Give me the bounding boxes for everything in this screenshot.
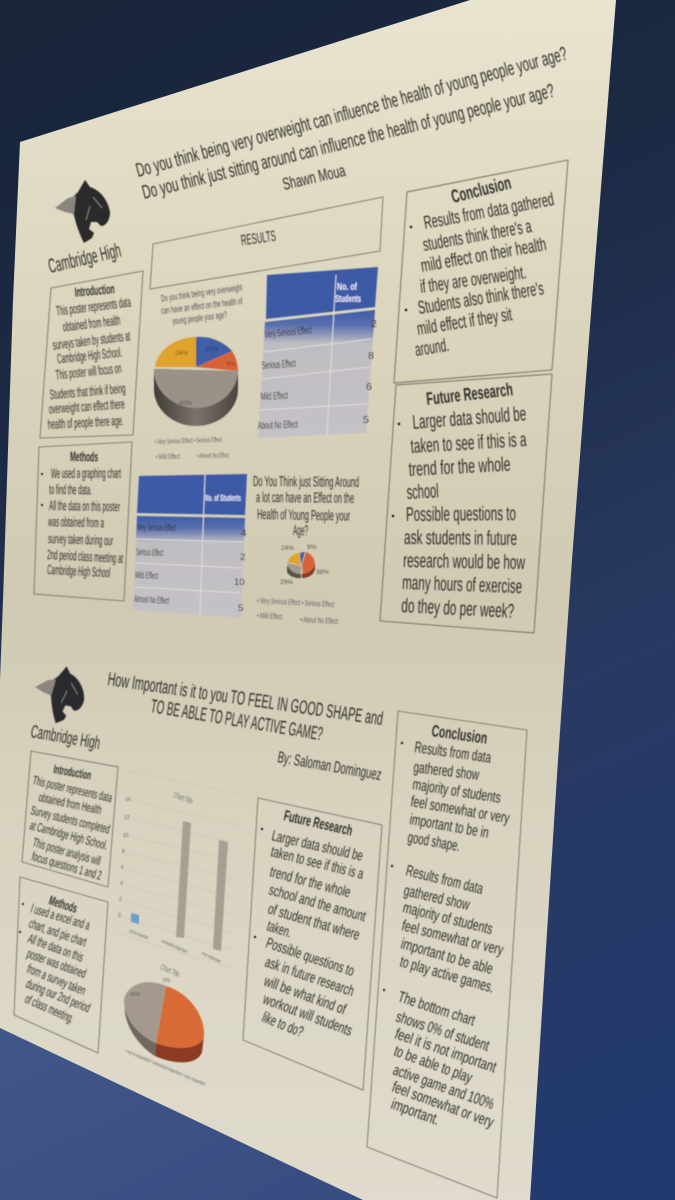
panel: conclusion: good shape. [406, 829, 461, 855]
bar chart: 6 [121, 865, 124, 871]
bar chart: 10 [123, 833, 129, 839]
pie chart: 0% [163, 978, 171, 984]
panel: conclusion: Conclusion [449, 172, 513, 207]
panel: future research: Future Research [425, 379, 514, 409]
pie chart 2: 9% [307, 544, 317, 551]
panel: conclusion: important. [389, 1096, 441, 1129]
table 1: Very Serious Effect [264, 324, 312, 341]
panel: conclusion: feel somewhat or very [390, 1079, 496, 1131]
table 1: Students [335, 294, 361, 305]
panel: conclusion: shows 0% of student [394, 1009, 492, 1055]
panel: future research: Future Research [282, 807, 354, 840]
pie chart [124, 963, 206, 1088]
school name: Cambridge High [29, 721, 102, 753]
table 2: 4 [241, 528, 246, 539]
table 2: Very Serious Effect [137, 522, 176, 534]
pie chart 1: 9% [226, 361, 236, 368]
pie chart 2: 24% [281, 545, 294, 552]
pie chart: ▪ not to important ▪ somewhat important ▪ very important [124, 1048, 206, 1088]
table 1: 8 [368, 350, 374, 362]
panel: conclusion: majority of students [401, 899, 495, 938]
panel: conclusion: feel it is not important [393, 1026, 499, 1076]
bar chart: Chart Title [172, 790, 194, 806]
pie chart: 46% [130, 992, 141, 998]
pie chart 2: 29% [280, 579, 293, 586]
panel: introduction [40, 271, 143, 438]
table 2: 5 [238, 603, 243, 614]
table 1: 6 [366, 381, 372, 393]
panel: methods: All the data on this poster [49, 498, 120, 514]
panel: introduction [22, 751, 118, 887]
panel: future research: Larger data should be [412, 403, 527, 434]
panel: future research: ask students in future [404, 527, 517, 550]
panel: methods: to find the data. [49, 482, 92, 497]
panel: future research: workout will students [260, 991, 355, 1040]
poster 2 title [106, 669, 384, 784]
chart 1 question [160, 282, 243, 327]
panel: future research: school and the amount [267, 882, 368, 926]
icon: panther logo [55, 180, 110, 243]
panel: introduction: Introduction [74, 281, 115, 300]
poster 2 title: TO BE ABLE TO PLAY ACTIVE GAME? [149, 696, 324, 745]
chart 1 legend [155, 437, 229, 461]
panel: introduction: Introduction [52, 762, 92, 783]
table 2: 2 [240, 552, 245, 563]
table 1: 2 [371, 318, 377, 330]
panel: conclusion: Results from data gathered [422, 188, 556, 233]
panel: introduction: This poster represents data [55, 294, 132, 319]
panel: future research: ask in future research [263, 954, 356, 1000]
chart 2 question: Age? [293, 523, 308, 539]
bar chart: very important [200, 950, 222, 965]
panel: methods: was obtained from a [47, 514, 105, 530]
panel: future research: like to do? [260, 1009, 306, 1041]
chart 2 legend: ▪ Mild Effect [257, 611, 283, 621]
panel: conclusion [367, 711, 527, 1198]
poster 2 title: How Important is it to you TO FEEL IN GOOD SHAPE and [106, 669, 384, 730]
poster 1 title: Shawn Moua [281, 161, 348, 194]
table 1 [258, 267, 378, 438]
pie chart 1: 24% [175, 350, 188, 357]
chart 1 legend: ▪ Very Serious Effect ▪ Serious Effect [155, 437, 222, 446]
chart 1 legend: ▪ Mild Effect [156, 454, 180, 461]
pie chart 1 [154, 337, 238, 426]
panel: introduction: This poster represents data [31, 773, 113, 805]
panel: conclusion: Results from data [404, 862, 485, 898]
panel: introduction: Cambridge High School. [56, 345, 123, 366]
panel: introduction: focus questions 1 and 2 [30, 849, 103, 883]
carpet: lower left wall [0, 1000, 420, 1200]
panel: methods: of class meeting. [23, 991, 76, 1026]
panel: conclusion: The bottom chart [396, 989, 478, 1030]
panel: methods: Methods [70, 449, 98, 464]
panel: conclusion: feel somewhat or very [400, 917, 505, 959]
panel: methods: Methods [47, 893, 79, 916]
panel: conclusion: Conclusion [430, 722, 488, 748]
panel: future research: trend for the whole [268, 863, 353, 901]
pie chart 1: 40% [179, 400, 192, 407]
panel: conclusion: majority of students [411, 776, 502, 807]
panel: conclusion: important to be in [408, 811, 490, 842]
panel: conclusion: gathered show [413, 759, 481, 784]
panel: conclusion: Students also think there's [416, 277, 545, 318]
panel: methods: I used a excel and a [29, 901, 92, 933]
table 1: Mild Effect [261, 390, 288, 403]
panel: methods: chart, and pie chart [27, 916, 89, 949]
panel: methods: We used a graphing chart [51, 466, 121, 481]
table 2 [133, 474, 247, 618]
panel: conclusion: active game and 100% [391, 1062, 496, 1113]
bar chart: 8 [122, 849, 125, 855]
bar chart [117, 771, 243, 968]
poster 2: good shape and active games survey [14, 662, 527, 1198]
chart 2 legend [257, 596, 339, 626]
panel: introduction: at Cambridge High School. [28, 818, 109, 853]
panel: conclusion: if they are overweight. [419, 261, 528, 297]
panel: conclusion: mild effect on their health [419, 233, 548, 276]
panel: introduction: This poster will focus on [55, 361, 122, 382]
panel: methods: All the data on this [26, 931, 86, 965]
chart 1 question: young people your age? [172, 310, 228, 327]
panel: conclusion: students think there's a [421, 215, 533, 255]
panel: introduction: overweight can effect there [48, 396, 125, 417]
bar chart: 0 [118, 913, 121, 919]
table 2: 10 [234, 577, 245, 588]
panel: results banner [150, 197, 383, 289]
bar chart: not to important [128, 928, 149, 941]
bar chart: 4 [120, 881, 123, 887]
panel: methods: from a survey taken [25, 961, 88, 998]
table 2: Mild Effect [135, 570, 158, 582]
pie chart 1: 18% [205, 346, 218, 353]
panel: introduction: obtained from health [62, 313, 121, 335]
panel: future research: many hours of exercise [402, 572, 523, 598]
panel: conclusion: feel somewhat or very [409, 793, 511, 827]
bar chart: 14 [125, 797, 131, 803]
panel: future research: of student that where [266, 901, 362, 944]
panel: introduction: Survey students completed [29, 803, 111, 837]
chart 1 question: can have an effect on the health of [160, 296, 243, 317]
panel: results banner: RESULTS [240, 228, 277, 249]
bar chart: 12 [124, 815, 130, 821]
table 2: Almost No Effect [134, 594, 170, 607]
school name: Cambridge High [46, 240, 123, 278]
table 1: About No Effect [258, 419, 298, 432]
pie chart 2: 38% [316, 569, 329, 576]
chart 1 question: Do you think being very overweight [160, 282, 243, 305]
table 2: Serious Effect [136, 547, 163, 559]
table 1: 5 [363, 414, 369, 426]
panel: methods [34, 442, 132, 601]
table 1: No. of [337, 282, 357, 293]
bar chart: somewhat important [160, 938, 189, 955]
panel: conclusion: around. [413, 334, 450, 360]
table 1: Serious Effect [261, 358, 296, 372]
panel: conclusion [394, 160, 568, 383]
panel: methods: poster was obtained [25, 946, 88, 981]
panel: methods: during our 2nd period [24, 976, 93, 1015]
chart 2 question: Health of Young People your [257, 507, 350, 525]
panel: future research: taken to see if this is a [269, 843, 366, 883]
chart 2 question: Do You Think just Sitting Around [253, 474, 359, 491]
chart 2 legend: ▪ Very Serious Effect ▪ Serious Effect [257, 596, 335, 609]
panel: future research: Larger data should be [270, 827, 365, 865]
poster 1 title [134, 43, 570, 204]
chart 2 legend: ▪ About No Effect [300, 615, 339, 626]
icon: panther logo [29, 662, 89, 727]
panel: methods: 2nd period class meeting at [47, 547, 124, 566]
panel: introduction: This poster analysis will [31, 835, 102, 868]
panel: future research: will be what kind of [261, 973, 349, 1018]
panel: methods: Cambridge High School [47, 562, 111, 580]
panel: future research: do they do per week? [401, 595, 515, 623]
panel: methods [14, 877, 108, 1053]
panel: conclusion: mild effect if they sit [415, 303, 513, 339]
panel: conclusion: to be able to play [392, 1043, 475, 1087]
panel: introduction: obtained from Health [37, 790, 103, 817]
chart 2 question: a lot can have an Effect on the [256, 490, 354, 507]
poster 1: overweight and sitting survey [34, 43, 570, 633]
bar chart: 2 [119, 897, 122, 903]
panel: conclusion: to play active games. [398, 954, 496, 997]
panel: introduction: health of people there age. [47, 413, 124, 432]
panel: future research [380, 374, 552, 633]
panel: future research: taken to see if this is a [410, 429, 528, 458]
poster 2 title: By: Saloman Dominguez [276, 749, 383, 784]
panel: introduction: Students that think if being [49, 381, 126, 402]
panel: introduction: surveys taken by students at [52, 328, 131, 353]
chart 1 legend: ▪ Almost No Effect [197, 452, 229, 460]
panel: conclusion: important to be able [399, 936, 495, 978]
panel: future research: Possible questions to [264, 935, 356, 980]
panel: future research: taken. [265, 918, 294, 942]
panel: future research: Possible questions to [406, 503, 516, 526]
pie chart: Chart Title [159, 963, 181, 979]
pie chart 2 [280, 544, 329, 586]
panel: conclusion: gathered show [402, 882, 472, 914]
table 2: No. of Students [205, 493, 241, 504]
panel: future research: school [406, 480, 439, 504]
chart 2 question [253, 474, 359, 539]
panel: future research: trend for the whole [408, 454, 511, 481]
panel: conclusion: Results from data [413, 739, 492, 767]
panel: future research: research would be how [403, 550, 526, 574]
panel: methods: survey taken during our [48, 531, 114, 548]
panel: future research [243, 798, 382, 1090]
